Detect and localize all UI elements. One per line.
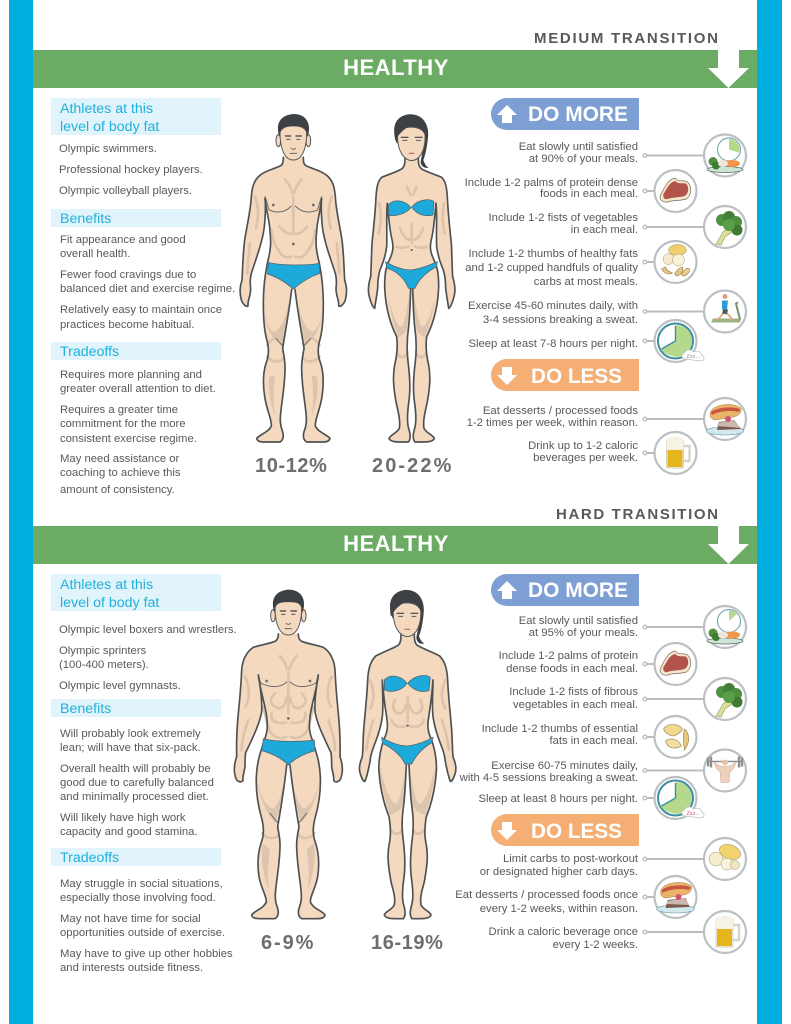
badge: do more [491,98,639,130]
left blue side bar [9,0,33,1024]
text: athletes list [59,143,203,197]
heading: tradeoffs: Tradeoffs [60,344,119,360]
text: fats and carbs [465,248,638,288]
text: protein: foods in each meal. [540,188,638,200]
banner: healthy [33,526,757,564]
icon: plate and clock [704,134,746,176]
text: eat slowly: Eat slowly until satisfied [519,615,638,627]
badge: do less: DO LESS [531,820,622,843]
panel: medium transition [33,30,757,496]
heading: medium transition: MEDIUM TRANSITION [534,30,718,47]
heading: benefits: Benefits [60,701,111,717]
heading: athletes: level of body fat [60,595,159,611]
icon: plate and clock [704,606,746,648]
figure: female 16-19% [359,590,456,919]
icon: nuts [654,716,696,758]
text: tradeoffs list: greater overall attention to diet. [60,383,216,395]
text: benefits list: and minimally processed diet. [60,791,209,803]
text: tradeoffs list: consistent exercise regime. [60,433,197,445]
icon: nuts and potatoes [654,241,696,283]
text: fats and carbs: carbs at most meals. [534,276,638,288]
badge: do less [491,359,639,391]
text: eat slowly [519,141,638,165]
text: essential fats [482,723,638,747]
text: tradeoffs list: and interests outside fitness. [60,962,203,974]
text: benefits list: Will likely have high work [60,812,186,824]
text: essential fats: Include 1-2 thumbs of essential [482,723,638,735]
text: benefits list: Fewer food cravings due to [60,269,196,281]
panel: hard transition [33,506,757,974]
text: tradeoffs list: especially those involving food. [60,892,216,904]
icon: sleep clock: Zzz... [686,354,700,360]
label: 20-22%: 20-22% [372,455,452,477]
text: caloric beverages: Drink up to 1-2 caloric [528,440,638,452]
icon: potatoes [704,838,746,880]
text: vegetables: Include 1-2 fists of vegetables [489,212,638,224]
text: sleep: Sleep at least 7-8 hours per night. [468,338,638,350]
text: tradeoffs list: May not have time for social [60,913,201,925]
text: athletes list: Professional hockey players. [59,164,203,176]
text: desserts: Eat desserts / processed foods [483,405,638,417]
icon: broccoli [704,678,746,720]
text: sleep: Sleep at least 8 hours per night. [478,793,638,805]
text: desserts: 1-2 times per week, within reason. [467,417,638,429]
icon: hot dog and dessert [704,398,746,440]
text: vegetables [509,686,638,711]
heading: tradeoffs: Tradeoffs [60,850,119,866]
text: benefits list: Will probably look extremely [60,728,201,740]
text: tradeoffs list: amount of consistency. [60,484,175,496]
text: tradeoffs list: Requires a greater time [60,404,178,416]
icon: weightlifter [704,750,746,792]
text: vegetables: in each meal. [571,224,638,236]
text: vegetables: Include 1-2 fists of fibrous [509,686,638,698]
text: exercise: 3-4 sessions breaking a sweat. [483,314,638,326]
text: desserts: every 1-2 weeks, within reason. [480,903,638,915]
text: tradeoffs list: May have to give up other hobbies [60,948,233,960]
text: exercise: Exercise 60-75 minutes daily, [491,760,638,772]
text: fats and carbs: and 1-2 cupped handfuls of quality [465,262,638,274]
badge: do more: DO MORE [528,103,628,126]
badge: do more: DO MORE [528,579,628,602]
text: eat slowly [519,615,638,639]
text: exercise: Exercise 45-60 minutes daily, with [468,300,638,312]
heading: tradeoffs [51,848,221,866]
text: benefits list: Fit appearance and good [60,234,186,246]
banner: healthy: HEALTHY [343,55,449,80]
text: benefits list [60,234,235,331]
text: tradeoffs list [60,369,216,496]
text: tradeoffs list: Requires more planning and [60,369,202,381]
text: athletes list: Olympic level gymnasts. [59,680,181,692]
text: caloric beverage: Drink a caloric beverage once [489,926,638,938]
text: athletes list: Olympic sprinters [59,645,147,657]
icon: treadmill runner [704,290,746,332]
text: tradeoffs list: May struggle in social situations, [60,878,223,890]
text: benefits list: practices become habitual. [60,319,194,331]
text: tradeoffs list: commitment for the more [60,418,186,430]
icon: steak [654,170,696,212]
text: vegetables: vegetables in each meal. [513,699,638,711]
text: eat slowly: at 90% of your meals. [529,153,638,165]
text: essential fats: fats in each meal. [549,735,638,747]
label: 10-12%: 10-12% [255,455,328,477]
text: fats and carbs: Include 1-2 thumbs of healthy fats [468,248,638,260]
heading: benefits [51,699,221,717]
icon: hot dog and dessert [654,876,696,918]
text: protein [499,650,638,675]
icon: beer mug [654,432,696,474]
text: protein [465,177,638,200]
heading: athletes [51,98,221,135]
figure: male 6-9% [234,590,342,919]
badge: do less: DO LESS [531,365,622,388]
text: limit carbs: Limit carbs to post-workout [503,853,639,865]
text: vegetables [489,212,638,236]
text: benefits list: balanced diet and exercise regime. [60,283,235,295]
text: tradeoffs list: May need assistance or [60,453,180,465]
icon: sleep clock [654,777,704,819]
text: caloric beverages: beverages per week. [533,452,638,464]
text: athletes list: Olympic swimmers. [59,143,157,155]
icon: sleep clock: Zzz... [686,811,700,817]
connector lines [643,625,704,934]
text: limit carbs: or designated higher carb days. [480,866,638,878]
text: tradeoffs list [60,878,233,974]
heading: athletes: Athletes at this [60,577,153,593]
heading: benefits: Benefits [60,211,111,227]
right blue side bar [757,0,782,1024]
heading: hard transition: HARD TRANSITION [556,506,718,523]
text: exercise: with 4-5 sessions breaking a sweat. [459,772,638,784]
text: eat slowly: at 95% of your meals. [529,627,638,639]
badge: do less [491,814,639,846]
banner: healthy [33,50,757,88]
text: athletes list: (100-400 meters). [59,659,149,671]
text: benefits list: Relatively easy to maintain once [60,304,222,316]
text: eat slowly: Eat slowly until satisfied [519,141,638,153]
text: desserts [455,889,638,915]
text: limit carbs [480,853,639,878]
text: tradeoffs list: opportunities outside of exercise. [60,927,225,939]
badge: do more [491,574,639,606]
text: protein: dense foods in each meal. [506,663,638,675]
text: athletes list: Olympic volleyball players. [59,185,192,197]
text: exercise [468,300,638,326]
heading: athletes [51,574,221,611]
text: protein: Include 1-2 palms of protein dense [465,177,638,189]
label: 16-19%: 16-19% [371,932,444,954]
heading: tradeoffs [51,342,221,360]
text: desserts: Eat desserts / processed foods once [455,889,638,901]
text: athletes list: Olympic level boxers and wrestlers. [59,624,237,636]
figure: female 20-22% [368,114,455,442]
text: protein: Include 1-2 palms of protein [499,650,638,662]
text: benefits list: good due to carefully balanced [60,777,214,789]
text: athletes list [59,624,237,692]
text: benefits list: overall health. [60,248,130,260]
text: tradeoffs list: coaching to achieve this [60,467,181,479]
icon: beer mug [704,911,746,953]
connector lines [643,154,704,455]
icon: broccoli [704,206,746,248]
heading: athletes: Athletes at this [60,101,153,117]
text: benefits list: capacity and good stamina. [60,826,198,838]
text: benefits list [60,728,214,838]
text: caloric beverage: every 1-2 weeks. [553,939,638,951]
banner: healthy: HEALTHY [343,531,449,556]
text: caloric beverages [528,440,638,464]
icon: steak [654,643,696,685]
icon: sleep clock [654,320,704,362]
text: desserts [467,405,638,429]
heading: athletes: level of body fat [60,119,159,135]
text: benefits list: lean; will have that six-pack. [60,742,201,754]
heading: benefits [51,209,221,227]
text: caloric beverage [489,926,638,951]
figure: male 10-12% [240,114,347,442]
label: 6-9%: 6-9% [261,932,314,954]
text: exercise [459,760,638,784]
text: benefits list: Overall health will probably be [60,763,211,775]
